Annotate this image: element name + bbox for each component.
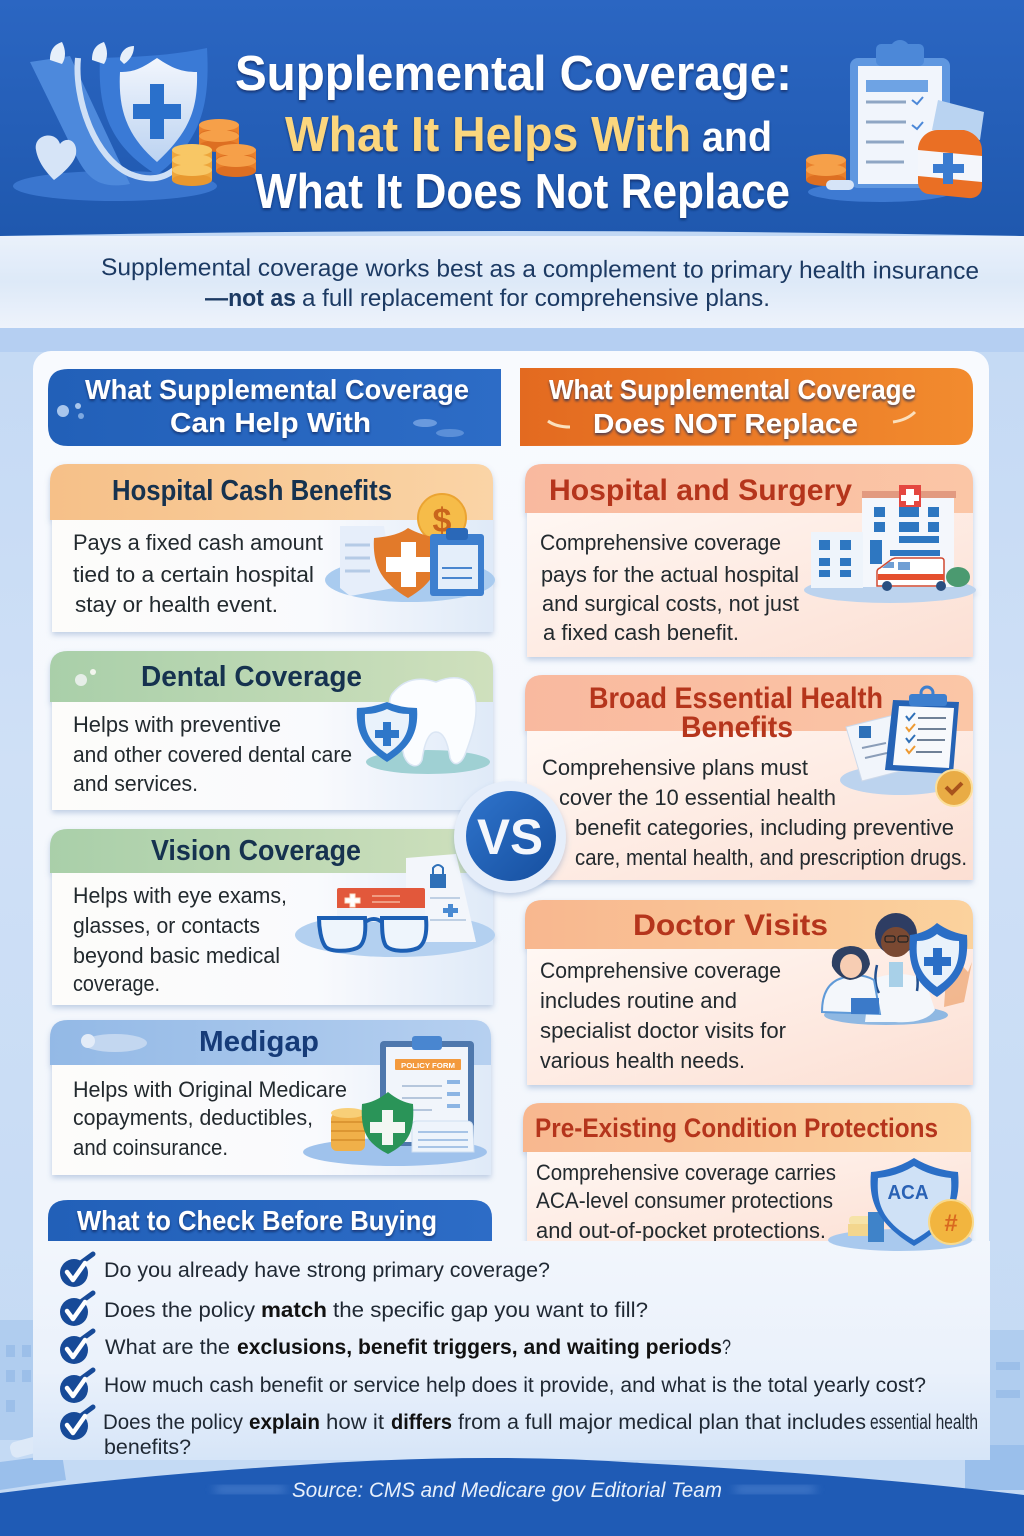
body text: various health needs. — [540, 1048, 745, 1073]
header: does not replace: What Supplemental Coverage — [549, 374, 916, 405]
skyline decoration left — [0, 1320, 66, 1490]
body text: and other covered dental care — [73, 742, 352, 767]
body text: and surgical costs, not just — [542, 591, 799, 616]
icon: cash shield clipboard — [325, 494, 495, 602]
heading: Hospital Cash Benefits — [112, 475, 392, 507]
icon: ACA shield: # — [944, 1210, 958, 1237]
item 2 — [60, 1293, 648, 1326]
body text — [542, 755, 967, 870]
body text — [73, 1077, 347, 1160]
icon: ACA shield — [828, 1158, 973, 1251]
card: hospital and surgery — [525, 464, 976, 657]
heading: Broad Essential Health — [589, 682, 883, 715]
icon: tooth with shield — [357, 678, 490, 774]
header: what to check before buying — [48, 1200, 492, 1241]
body text: Helps with eye exams, — [73, 883, 287, 908]
card: pre-existing condition protections — [523, 1103, 971, 1245]
body text: Comprehensive coverage — [540, 530, 781, 555]
body text: and coinsurance. — [73, 1135, 228, 1160]
body text: includes routine and — [540, 988, 737, 1013]
bottom checklist panel fade — [33, 1241, 990, 1460]
item 5: how it — [326, 1410, 384, 1434]
body text: beyond basic medical — [73, 943, 280, 968]
body text: and out-of-pocket protections. — [536, 1218, 826, 1243]
title: What It Does Not Replace — [255, 165, 790, 219]
body text: a fixed cash benefit. — [543, 620, 739, 645]
item 5: from a full major medical plan that includes — [458, 1410, 866, 1434]
item 4 — [60, 1370, 926, 1403]
body text: Comprehensive plans must — [542, 755, 808, 780]
top banner — [0, 0, 1024, 236]
icon: hospital with ambulance — [804, 485, 976, 603]
item 1: Do you already have strong primary coverage? — [104, 1258, 550, 1282]
heading: Doctor Visits — [633, 909, 828, 942]
heading: Hospital and Surgery — [549, 474, 852, 507]
body text: Comprehensive coverage carries — [536, 1160, 836, 1185]
item 5: explain — [249, 1410, 320, 1434]
title: Supplemental Coverage: — [235, 47, 792, 101]
body text — [73, 530, 323, 617]
body text: care, mental health, and prescription drugs. — [575, 845, 967, 870]
heading: Medigap — [199, 1026, 319, 1058]
VS badge: VS — [477, 809, 543, 865]
icon: glasses and documents — [295, 854, 495, 957]
item 1 — [60, 1254, 550, 1287]
heading: Pre-Existing Condition Protections — [535, 1113, 938, 1143]
icon: cash shield clipboard: $ — [433, 502, 452, 540]
header: can help with — [48, 369, 501, 446]
item 4: How much cash benefit or service help does it provide, and what is the total yearly cost? — [104, 1373, 926, 1397]
card: dental coverage — [50, 651, 493, 810]
header: what to check before buying: What to Check Before Buying — [77, 1205, 437, 1236]
card: broad essential health benefits — [525, 675, 973, 880]
heading — [589, 682, 883, 744]
title: What It Helps With — [285, 108, 691, 162]
item 3: What are the — [105, 1335, 230, 1359]
body text: coverage. — [73, 971, 160, 996]
title: and — [702, 113, 772, 160]
body text: glasses, or contacts — [73, 913, 260, 938]
header: can help with: Can Help With — [170, 407, 371, 438]
checklist — [60, 1254, 978, 1459]
body text: Helps with Original Medicare — [73, 1077, 347, 1102]
body text: stay or health event. — [75, 592, 278, 617]
body text — [73, 883, 287, 996]
header: can help with: What Supplemental Coverage — [85, 374, 469, 405]
body text — [536, 1160, 836, 1243]
body text: ACA-level consumer protections — [536, 1188, 833, 1213]
footer wave — [0, 1458, 1024, 1536]
main panel — [33, 351, 989, 1460]
item 3: ? — [722, 1335, 731, 1359]
body text: tied to a certain hospital — [73, 562, 314, 587]
header: does not replace — [520, 368, 973, 446]
header: does not replace: Does NOT Replace — [593, 408, 858, 439]
body text: and services. — [73, 771, 198, 796]
item 2: the specific gap you want to fill? — [333, 1298, 648, 1322]
intro text: a full replacement for comprehensive plans. — [302, 285, 770, 312]
intro text — [101, 254, 979, 312]
item 5: essential health — [870, 1410, 978, 1434]
title — [235, 47, 792, 219]
card: medigap — [50, 1020, 491, 1175]
icon: ACA shield: ACA — [888, 1182, 928, 1204]
icon: clipboard, shield, coins: POLICY FORM — [401, 1063, 455, 1070]
item 3: exclusions, benefit triggers, and waiting periods — [237, 1335, 722, 1359]
icon: clipboard, shield, coins — [303, 1036, 487, 1166]
heading: Benefits — [681, 711, 793, 744]
body text: Comprehensive coverage — [540, 958, 781, 983]
body text: copayments, deductibles, — [73, 1105, 313, 1130]
body text: Helps with preventive — [73, 712, 281, 737]
item 2: Does the policy — [104, 1298, 255, 1322]
item 5: Does the policy — [103, 1410, 243, 1434]
body text: specialist doctor visits for — [540, 1018, 786, 1043]
body text — [540, 958, 786, 1073]
source: Source: CMS and Medicare gov Editorial Team — [292, 1479, 722, 1502]
VS badge — [454, 781, 566, 893]
card: doctor visits — [525, 900, 973, 1085]
intro text: Supplemental coverage works best as a complement to primary health insurance — [101, 254, 979, 285]
icon: clipboard and pill bottle — [806, 42, 984, 202]
card: hospital cash benefits — [50, 464, 495, 632]
item 5: benefits? — [104, 1435, 191, 1459]
body text: benefit categories, including preventive — [575, 815, 954, 840]
item 2: match — [261, 1298, 327, 1322]
icon: shield, stethoscope and coins — [13, 42, 256, 201]
body text: pays for the actual hospital — [541, 562, 799, 587]
heading: Dental Coverage — [141, 661, 362, 693]
body text — [73, 712, 352, 796]
item 3 — [60, 1331, 731, 1364]
item 5 — [60, 1407, 978, 1459]
item 5: differs — [391, 1410, 452, 1434]
icon: doctors and shield — [822, 913, 972, 1025]
skyline decoration right — [965, 1330, 1024, 1490]
intro text: —not as — [205, 285, 296, 312]
body text: cover the 10 essential health — [559, 785, 836, 810]
card: vision coverage — [50, 829, 495, 1005]
body text: Pays a fixed cash amount — [73, 530, 323, 555]
intro band — [0, 236, 1024, 352]
icon: checklist clipboard — [840, 687, 972, 806]
heading: Vision Coverage — [151, 835, 361, 867]
body text — [540, 530, 799, 645]
